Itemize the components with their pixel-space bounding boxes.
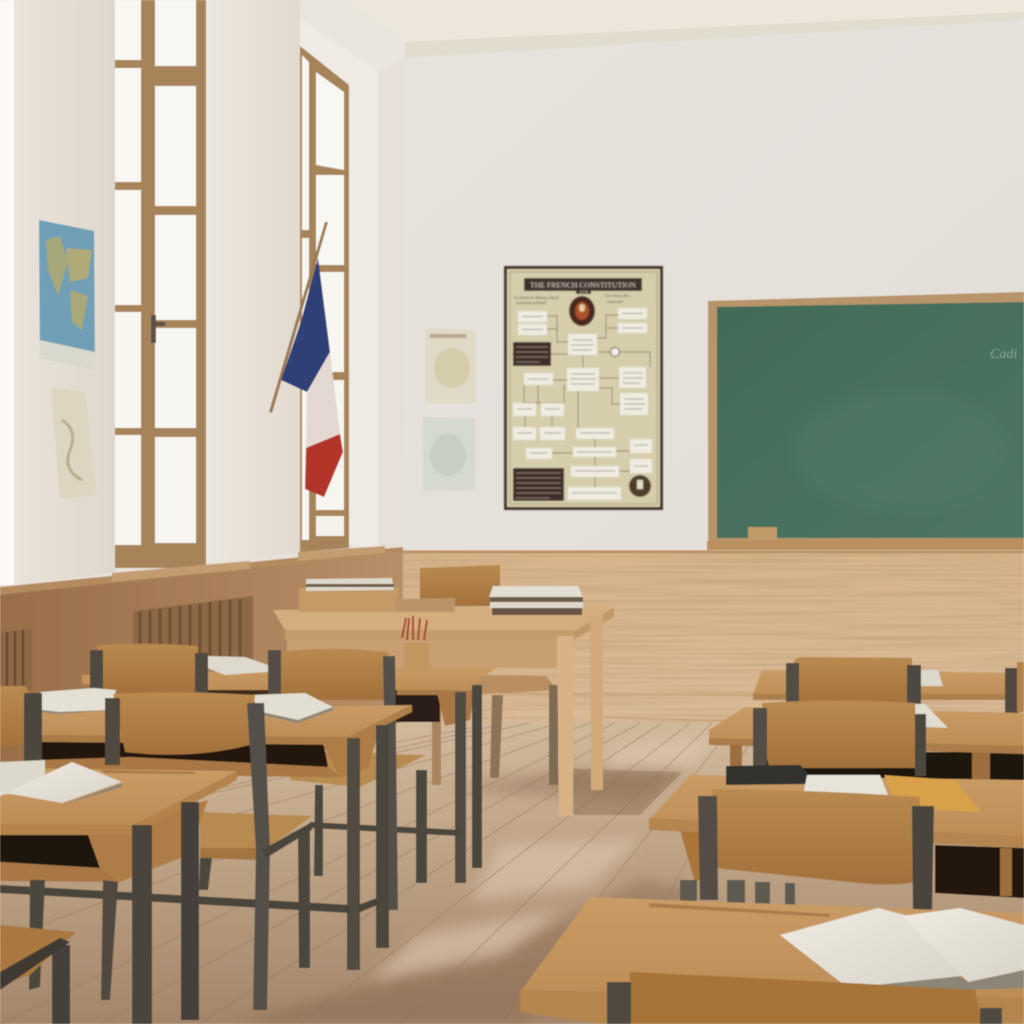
centre wall pier [205,0,300,562]
back wall [403,20,1024,552]
open book [780,908,1024,992]
chair middle left [105,692,312,1010]
poster quotes [513,294,630,305]
middle left desk [0,688,412,970]
book on teacher desk [395,598,455,612]
window reveal [300,18,378,548]
floor shadows [230,770,700,1024]
poster seal [569,296,595,326]
book front left desk [0,760,122,805]
large window sill [112,561,250,582]
wood floor [0,720,1024,1024]
chair behind teacher desk [420,565,558,785]
poster title: THE FRENCH CONSTITUTION [530,280,637,290]
front left desk [0,760,237,1024]
chalk writing: Cadi [990,347,1017,362]
far left book [40,688,116,714]
left wall wainscot [0,549,403,810]
white paper [803,775,888,795]
book far right [921,670,943,686]
blackboard [707,292,1024,554]
chair far left [0,686,42,761]
left wall [0,0,405,592]
teacher desk [273,578,614,816]
poster title: 1958 [579,290,589,294]
pencil cup [402,616,429,675]
chair third right desk [698,789,934,910]
floor planks [0,723,760,1024]
floor light bands [370,735,725,980]
paper map [51,388,96,499]
poster quotes: "Une Nation libre [604,294,630,298]
third right desk [649,765,1024,910]
french constitution poster [504,266,663,510]
second right desk [709,700,1024,782]
poster connector lines [512,315,650,487]
left cornice [300,0,405,72]
poster laurel emblem [629,475,651,497]
poster box text [517,314,648,493]
box on teacher desk [299,578,399,612]
back wall wainscot [403,550,1024,725]
pencil groove [649,903,830,917]
far left window light [0,0,14,585]
wall map one [425,328,476,403]
large window [115,0,206,568]
poster small medallion [610,348,620,356]
orange folder [884,775,981,812]
chair second right desk [753,700,926,776]
world map poster [39,220,95,369]
pencil case [726,765,807,785]
front left chair seat [0,925,76,1024]
flag [269,222,343,497]
chair left back centre [268,649,427,910]
poster quotes: souveraine" [607,300,625,304]
book left back desk [207,656,268,675]
chalk tray [707,539,1024,554]
left wall pier [14,0,115,586]
small radiator [0,629,32,690]
large radiator [133,596,253,660]
teacher desk floor shadow [550,768,682,815]
poster quotes: "Les Droits de l'Homme, liberté [513,296,559,301]
chair left back left [90,644,208,693]
poster quotes: souveraine nationale" [516,301,548,305]
crown moulding [405,12,1024,58]
poster title [524,278,642,294]
chair front right desk [607,972,1002,1024]
wall map two [423,417,475,491]
narrow window [300,46,349,552]
eraser [748,527,777,540]
book second right desk [820,702,948,728]
narrow window sill [298,546,385,561]
left back desk [82,616,499,883]
chair far right edge [1005,662,1024,713]
ceiling [330,0,1024,42]
front right desk [520,897,1024,1024]
poster dark text panels [513,342,564,501]
book middle left desk [250,693,333,723]
poster white boxes [513,308,652,500]
far right desk [753,657,1024,713]
stack of books [489,586,583,615]
chair far right desk centre [786,657,921,705]
